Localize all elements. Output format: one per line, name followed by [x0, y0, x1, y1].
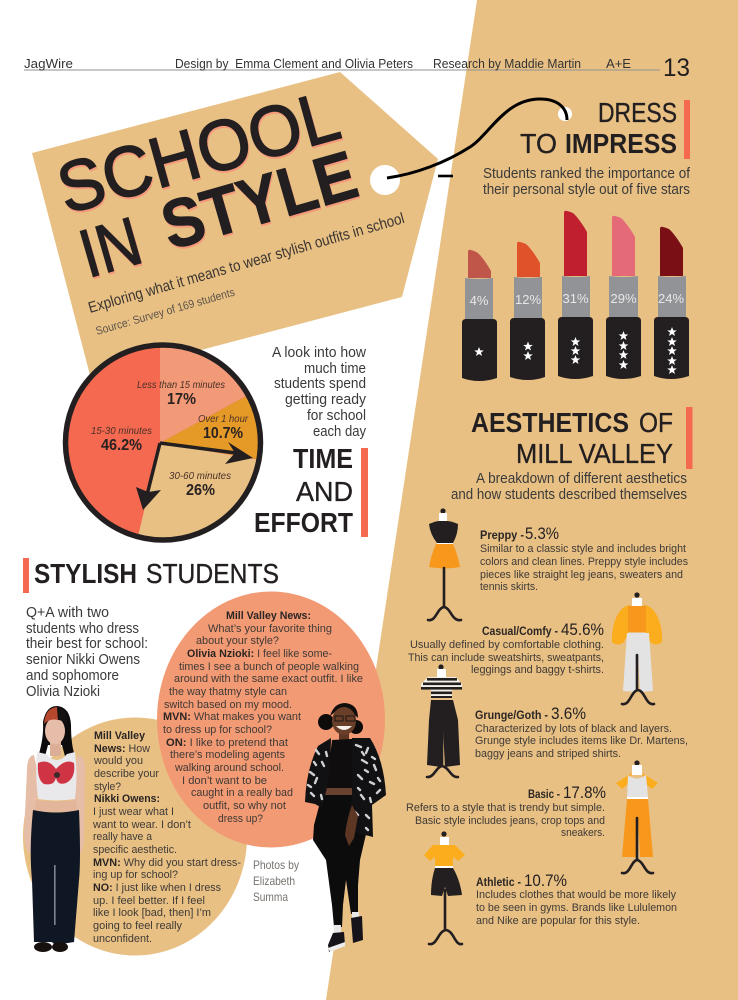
bubble: Olivia interview: What’s your favorite thing	[208, 623, 332, 635]
text: casual: Usually defined by comfortable clothing.	[410, 639, 604, 651]
heading: aesthetics of mill valley: OF	[639, 407, 673, 438]
text: Q+A intro: and sophomore	[26, 668, 119, 684]
mannequin: grunge	[421, 664, 462, 777]
text: athletic	[476, 872, 677, 927]
bubble: Olivia interview: times I see a bunch of people walking	[179, 661, 359, 673]
bubble: Nikki interview: want to wear. I don’t	[92, 819, 192, 831]
bubble: Nikki interview: like I look [bad, then] I’m	[93, 907, 211, 919]
bubble: Olivia interview: Mill Valley News:	[226, 610, 311, 622]
heading: dress to impress: IMPRESS	[565, 128, 677, 159]
heading: time and effort: AND	[296, 476, 353, 507]
heading: time and effort: EFFORT	[254, 507, 353, 538]
bubble: Olivia interview: about your style?	[196, 635, 279, 647]
pie chart: 17%	[167, 391, 196, 408]
lipstick: three stars: 31%	[562, 291, 589, 306]
text: preppy: 5.3%	[525, 525, 559, 543]
text: Q+A intro: Q+A with two	[26, 605, 109, 621]
text: grunge: Grunge style includes items like Dr. Martens,	[475, 735, 688, 747]
text: aesthetics intro: and how students described themselves	[451, 487, 687, 503]
bubble: Nikki interview	[23, 718, 247, 956]
bubble: Olivia interview: I don’t want to be	[182, 775, 267, 787]
text: athletic: Includes clothes that would be more likely	[476, 889, 676, 901]
bubble: Olivia interview: Olivia Nzioki: I feel like some-	[187, 648, 332, 660]
title	[49, 76, 365, 292]
text: grunge: Grunge/Goth -	[475, 710, 548, 722]
text: casual: leggings and baggy t-shirts.	[471, 664, 604, 676]
header line: JagWire	[24, 56, 73, 71]
text: athletic: 10.7%	[524, 872, 567, 890]
text: time intro: for school	[307, 408, 366, 424]
text: casual: Casual/Comfy -	[482, 626, 558, 638]
text: grunge: baggy jeans and striped shirts.	[475, 748, 621, 760]
lipstick: five stars	[654, 227, 689, 379]
text: aesthetics intro	[451, 471, 687, 503]
text: Q+A intro: their best for school:	[26, 636, 148, 652]
heading: dress to impress	[520, 97, 690, 159]
pie chart: 15-30 minutes	[91, 425, 153, 437]
subtitle: Exploring what it means to wear stylish outfits in school	[86, 210, 406, 317]
bubble: Olivia interview: dress up?	[218, 813, 263, 825]
text: dress to impress intro: Students ranked the importance of	[483, 166, 691, 182]
photo credit: Summa	[253, 890, 288, 904]
text: preppy	[480, 525, 688, 593]
bubble: Nikki interview: Mill Valley	[94, 730, 146, 742]
bubble: Olivia interview: to dress up for school?	[163, 724, 272, 736]
text: time intro: students spend	[274, 376, 366, 392]
bubble: Nikki interview: unconfident.	[93, 933, 152, 945]
price tag shape	[32, 72, 438, 379]
heading: aesthetics of mill valley: MILL VALLEY	[516, 438, 673, 469]
lipstick: three stars	[558, 211, 593, 379]
text: preppy: Similar to a classic style and includes bright	[480, 543, 687, 555]
text: Q+A intro: students who dress	[26, 621, 139, 637]
bubble: Olivia interview: ON: I like to pretend that	[166, 737, 289, 749]
pie chart	[62, 342, 264, 543]
text: basic: sneakers.	[561, 827, 605, 839]
title: SCHOOL	[49, 76, 348, 229]
text: preppy: tennis skirts.	[480, 581, 538, 593]
bubble: Nikki interview: style?	[94, 781, 121, 793]
bubble: Olivia interview: caught in a really bad	[191, 787, 293, 799]
text: grunge	[475, 705, 688, 760]
bubble: Nikki interview: up. I feel better. If I feel	[93, 895, 205, 907]
mannequin: basic	[616, 760, 658, 873]
header line: Research by Maddie Martin	[433, 56, 581, 71]
text: Q+A intro: Olivia Nzioki	[26, 684, 100, 700]
lipstick: two stars: 12%	[515, 292, 541, 307]
lipstick: two stars	[510, 242, 545, 380]
photo credit: Elizabeth	[253, 874, 295, 888]
text: basic: 17.8%	[563, 784, 606, 802]
bubble: Nikki interview: really have a	[93, 831, 153, 843]
header line: 13	[663, 54, 690, 82]
text: time intro: A look into how	[272, 345, 366, 361]
text: casual	[408, 621, 604, 676]
photo: Nikki	[24, 706, 85, 952]
heading: time and effort: TIME	[293, 443, 353, 474]
title: IN	[71, 203, 150, 292]
source note: Source: Survey of 169 students	[95, 287, 236, 338]
pie chart: Over 1 hour	[198, 413, 248, 425]
tag string	[387, 99, 572, 178]
text: preppy: colors and clean lines. Preppy style includes	[480, 556, 688, 568]
bubble: Olivia interview: switch based on my mood.	[164, 699, 292, 711]
lipstick: one star	[462, 250, 497, 381]
lipstick: four stars: 29%	[610, 291, 637, 306]
text: casual: This can include sweatshirts, sweatpants,	[408, 652, 604, 664]
header line: A+E	[606, 56, 631, 71]
text: dress to impress intro	[483, 166, 691, 198]
photo credit	[253, 858, 299, 904]
heading: stylish students	[23, 558, 279, 593]
title: STYLE	[153, 137, 365, 264]
text: time intro	[272, 345, 367, 440]
text: athletic: Athletic -	[476, 877, 521, 889]
header line: Design by Emma Clement and Olivia Peters	[175, 56, 413, 71]
bubble: Nikki interview: I just wear what I	[93, 806, 174, 818]
lipstick: four stars	[606, 216, 641, 379]
text: time intro: each day	[313, 424, 367, 440]
header line	[24, 54, 690, 82]
bubble: Olivia interview	[157, 592, 385, 848]
mannequin: preppy	[428, 508, 461, 620]
text: dress to impress intro: their personal style out of five stars	[483, 182, 690, 198]
text: athletic: to be seen in gyms. Brands like Lululemon	[476, 902, 677, 914]
lipstick: five stars: 24%	[658, 291, 684, 306]
bubble: Olivia interview: there’s modeling agents	[170, 749, 285, 761]
heading: aesthetics of mill valley: AESTHETICS	[471, 407, 629, 438]
text: aesthetics intro: A breakdown of different aesthetics	[476, 471, 687, 487]
bubble: Olivia interview: outfit, so why not	[203, 800, 287, 812]
pie chart: 10.7%	[203, 425, 243, 442]
text: grunge: 3.6%	[551, 705, 586, 723]
bubble: Nikki interview: going to feel really	[93, 920, 182, 932]
photo: Olivia	[305, 703, 386, 952]
heading: time and effort	[254, 443, 368, 538]
bubble: Olivia interview: around with the same exact outfit. I like	[174, 673, 363, 685]
bubble: Olivia interview: walking around school.	[174, 762, 284, 774]
lipstick: one star: 4%	[470, 293, 489, 308]
bubble: Olivia interview: MVN: What makes you want	[163, 711, 302, 723]
pie chart: 30-60 minutes	[169, 470, 232, 482]
bubble: Nikki interview: would you	[93, 755, 143, 767]
bubble: Olivia interview: the way thatmy style can	[169, 686, 287, 698]
heading: stylish students: STUDENTS	[146, 558, 279, 589]
bubble: Nikki interview: ing up for school?	[93, 869, 178, 881]
photo credit: Photos by	[253, 858, 299, 872]
heading: dress to impress: DRESS	[598, 97, 677, 128]
text: grunge: Characterized by lots of black and layers.	[475, 723, 672, 735]
pie chart: 26%	[186, 482, 215, 499]
text: time intro: getting ready	[285, 392, 367, 408]
text: basic: Basic style includes jeans, crop tops and	[415, 815, 605, 827]
bubble: Nikki interview: NO: I just like when I dress	[93, 882, 221, 894]
bubble: Nikki interview: Nikki Owens:	[94, 793, 160, 805]
text: basic: Basic -	[528, 789, 560, 801]
lipstick chart	[462, 211, 689, 381]
heading: aesthetics of mill valley	[471, 407, 692, 469]
heading: stylish students: STYLISH	[34, 558, 137, 589]
bubble: Nikki interview: specific aesthetic.	[93, 844, 177, 856]
mannequin: casual	[612, 592, 662, 704]
text: basic	[406, 784, 606, 839]
arrows	[136, 442, 253, 510]
text: preppy: pieces like straight leg jeans, sweaters and	[480, 569, 683, 581]
text: preppy: Preppy -	[480, 530, 524, 542]
mannequin: athletic	[424, 831, 465, 944]
text: time intro: much time	[304, 361, 366, 377]
bubble: Nikki interview: describe your	[94, 768, 159, 780]
panel: tan right background	[326, 0, 738, 1000]
heading: dress to impress: TO	[520, 128, 557, 159]
text: casual: 45.6%	[561, 621, 604, 639]
text: Q+A intro	[26, 605, 148, 700]
bubble: Nikki interview: MVN: Why did you start dress-	[93, 857, 241, 869]
pie chart: 46.2%	[101, 437, 142, 454]
text: basic: Refers to a style that is trendy but simple.	[406, 802, 605, 814]
pie chart: Less than 15 minutes	[137, 379, 226, 391]
text: Q+A intro: senior Nikki Owens	[26, 652, 140, 668]
text: athletic: and Nike are popular for this style.	[476, 915, 640, 927]
bubble: Nikki interview: News: How	[94, 743, 151, 755]
